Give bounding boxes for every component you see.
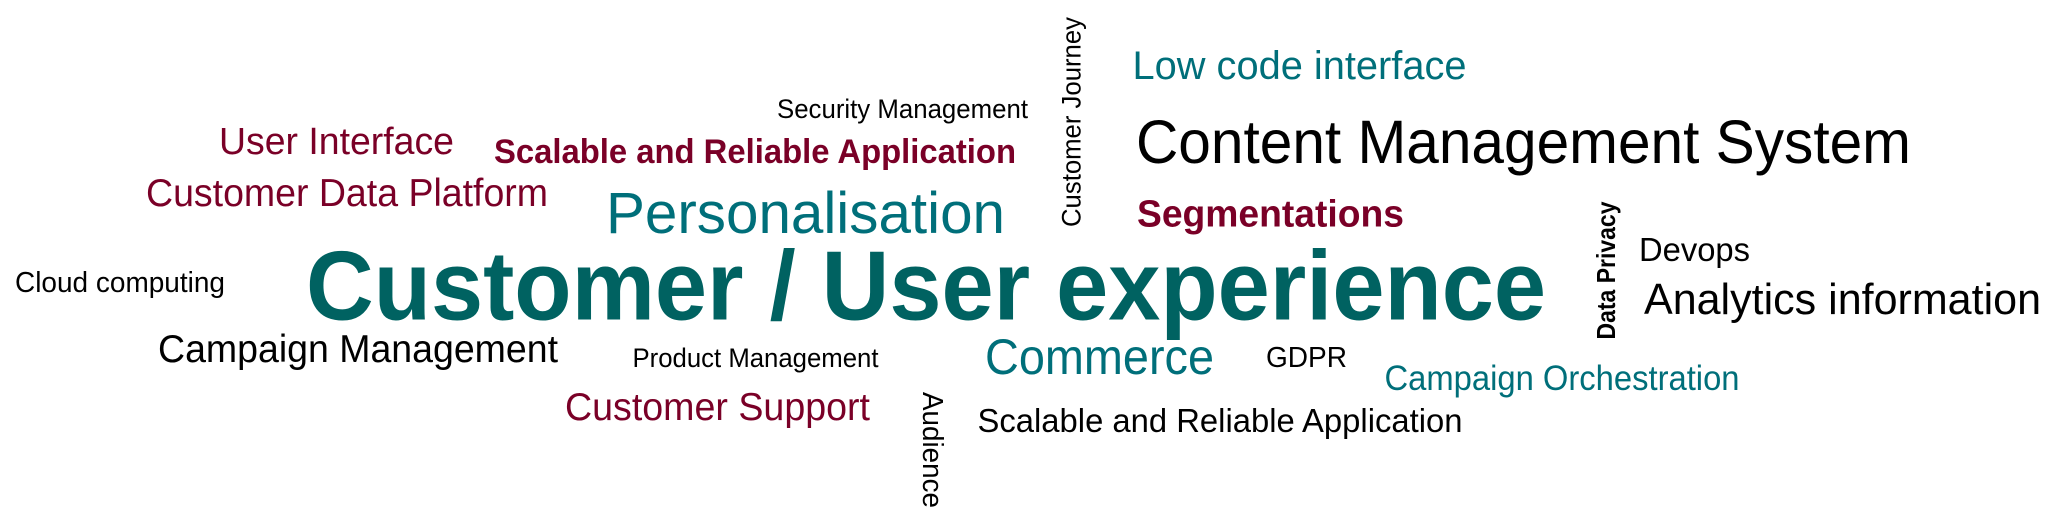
word: Scalable and Reliable Application (regular): Scalable and Reliable Application	[978, 402, 1462, 439]
word: Customer Journey: Customer Journey	[1056, 17, 1086, 227]
word: Customer Support: Customer Support	[565, 386, 870, 429]
word: Customer Data Platform: Customer Data Platform	[146, 172, 548, 215]
word: GDPR: GDPR	[1266, 342, 1347, 374]
word: Audience: Audience	[916, 392, 948, 508]
word: Low code interface: Low code interface	[1132, 44, 1466, 88]
word: Commerce: Commerce	[985, 329, 1214, 385]
word: Scalable and Reliable Application (bold): Scalable and Reliable Application	[494, 133, 1016, 171]
word: Data Privacy: Data Privacy	[1591, 201, 1621, 340]
word: Content Management System: Content Management System	[1136, 108, 1911, 176]
word: Product Management: Product Management	[632, 343, 879, 373]
word: Campaign Management: Campaign Management	[158, 328, 558, 371]
word: Campaign Orchestration: Campaign Orchestration	[1384, 359, 1740, 398]
word: Segmentations: Segmentations	[1137, 194, 1404, 236]
word: Analytics information: Analytics information	[1644, 275, 2041, 324]
word: Security Management: Security Management	[777, 94, 1028, 124]
word: Personalisation: Personalisation	[606, 181, 1005, 246]
word: User Interface: User Interface	[219, 121, 454, 163]
word: Devops: Devops	[1639, 231, 1750, 268]
word: Cloud computing: Cloud computing	[15, 267, 225, 299]
word: Customer / User experience: Customer / User experience	[306, 230, 1546, 340]
